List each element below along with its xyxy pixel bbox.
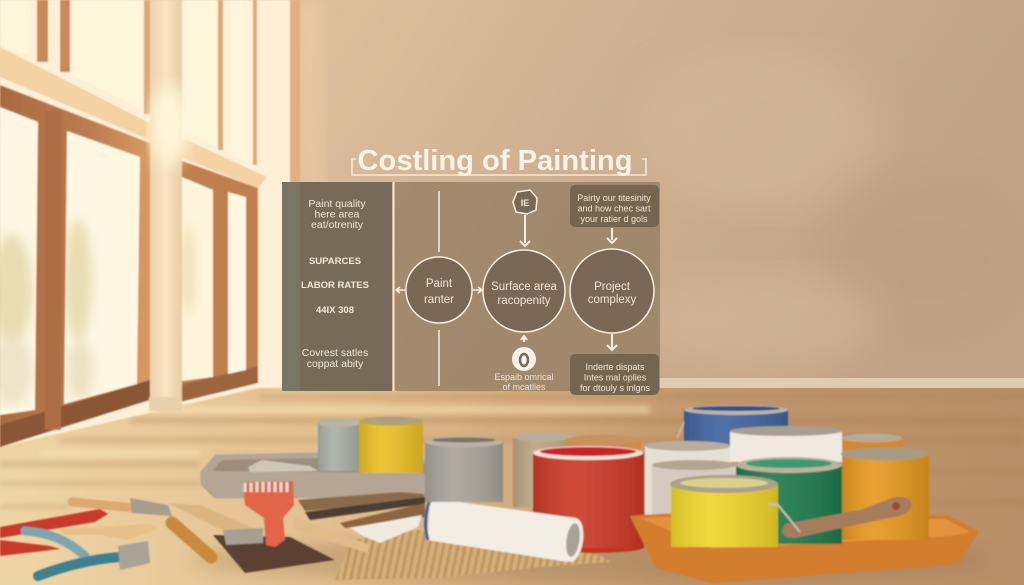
baseboard xyxy=(655,378,1024,388)
circle: surface area: Surface area xyxy=(491,281,557,293)
bright window wall backing xyxy=(0,0,290,447)
text: paint quality: here area xyxy=(315,208,360,220)
can: yellow xyxy=(359,416,423,473)
divider line xyxy=(393,182,394,391)
text: coverage: Covrest satles xyxy=(302,347,368,359)
circle: paint ranter xyxy=(406,257,472,323)
can: silver rear xyxy=(645,441,731,517)
circle: paint ranter: ranter xyxy=(424,294,454,306)
wood sticks xyxy=(292,517,370,553)
can: green xyxy=(736,457,842,544)
circle: paint ranter: Paint xyxy=(426,278,452,290)
callout: top right: Pairty our titesinity xyxy=(577,193,651,203)
circle: project complexity: Project xyxy=(594,281,630,293)
callout: top right: your ratier d gols xyxy=(580,214,648,224)
can: white xyxy=(730,426,842,462)
text: bottom caption: Espaib omrical xyxy=(494,372,554,382)
can: ribbed tan xyxy=(513,432,575,507)
orange-red brush xyxy=(243,481,294,547)
lower window glass xyxy=(0,107,246,415)
text: dimensions: 44IX 308 xyxy=(316,305,354,316)
upper window frames xyxy=(37,0,300,182)
text: labor rates: LABOR RATES xyxy=(301,280,369,291)
lower right window frame xyxy=(180,160,258,402)
wooden board xyxy=(213,535,335,573)
windows xyxy=(0,0,300,447)
can: silver front xyxy=(652,460,736,517)
trees seen through the glass xyxy=(0,220,195,405)
base of column xyxy=(149,397,182,411)
upper window glass xyxy=(0,0,248,163)
icon: bottom badge xyxy=(512,347,536,371)
can: blue xyxy=(677,405,788,449)
text: surfaces: SUPARCES xyxy=(309,256,361,267)
icon: top badge xyxy=(513,190,537,214)
cream palette tool xyxy=(57,524,160,540)
brushes and tools xyxy=(0,481,425,576)
text: paint quality: Paint quality xyxy=(308,198,366,210)
callout: bottom right: Intes mal oplies xyxy=(584,372,647,382)
flat brush with wood handle xyxy=(72,502,135,508)
lower left window frame xyxy=(0,85,150,447)
callout: top right: and how chec sart xyxy=(577,204,651,214)
can: grey-blue xyxy=(318,419,360,471)
circle: project complexity xyxy=(570,249,654,333)
text: coverage: coppat abity xyxy=(307,358,364,370)
callout: top right xyxy=(570,185,659,227)
blue handled brush xyxy=(25,531,120,576)
background: textured wall xyxy=(0,0,1024,395)
orange tray xyxy=(632,515,977,582)
can: grey large xyxy=(425,437,503,502)
callout: bottom right xyxy=(570,354,659,395)
floor: wooden planks xyxy=(0,388,1024,585)
can: orange small rear xyxy=(842,434,902,450)
can: red xyxy=(533,446,644,553)
grey tray xyxy=(202,454,425,497)
can: orange xyxy=(841,448,929,540)
wooden brush handle xyxy=(172,523,211,557)
circle: surface area: racopenity xyxy=(497,295,551,307)
mini roller handle xyxy=(768,497,912,538)
title: Costling of Painting xyxy=(358,145,632,177)
cloth xyxy=(350,515,422,543)
group: paint trays, cans and tools xyxy=(0,405,990,582)
column xyxy=(150,0,182,411)
can: yellow front xyxy=(670,475,778,547)
can: orange rear xyxy=(566,435,641,452)
panel: diagram background xyxy=(394,182,660,391)
text: bottom caption: of mcatlies xyxy=(502,382,546,392)
woven mat xyxy=(335,530,610,580)
circle: surface area xyxy=(483,250,565,332)
text: paint quality: eat/otrenity xyxy=(311,219,364,231)
shadow under objects xyxy=(190,538,990,582)
lines and arrows xyxy=(396,191,617,386)
paint roller xyxy=(426,498,586,563)
red handles xyxy=(0,509,108,538)
upper beam xyxy=(0,47,267,188)
title bracket xyxy=(352,159,646,175)
callout: bottom right: for dtouly s inlgns xyxy=(580,383,651,393)
icon: top badge: IE xyxy=(521,198,529,208)
window mullion xyxy=(45,112,61,430)
callout: bottom right: Inderte dispats xyxy=(585,362,645,372)
bundle of brushes xyxy=(298,492,424,511)
circle: project complexity: complexy xyxy=(588,294,637,306)
panel: left cost factors xyxy=(282,182,392,391)
